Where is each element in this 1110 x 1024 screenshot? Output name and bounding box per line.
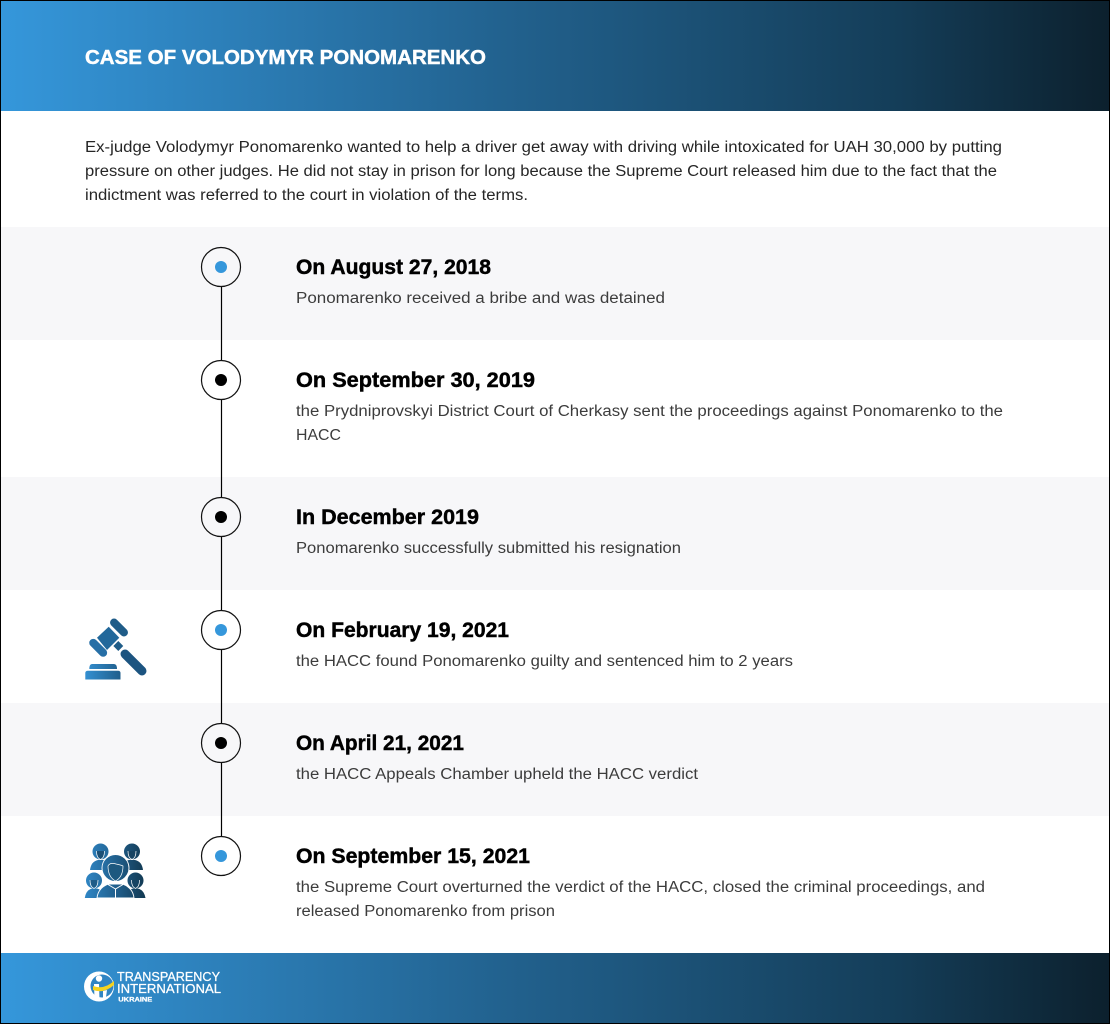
gavel base top: [89, 664, 117, 669]
back right judge: [120, 844, 143, 870]
event: September 30, 2019: HACC: [296, 427, 341, 444]
footer band: [0, 953, 1110, 1024]
event: August 27, 2018: On August 27, 2018: [296, 256, 491, 279]
timeline marker: December 2019: [202, 498, 240, 536]
logo wordmark: INTERNATIONAL: [117, 982, 221, 996]
logo: Transparency International Ukraine: [84, 970, 221, 1004]
timeline connector line: [220, 287, 222, 836]
logo globe: [84, 972, 114, 1002]
gavel head body: [97, 627, 119, 650]
intro text: pressure on other judges. He did not stay in prison for long because the Supreme Court released him due to the fact that the: [85, 163, 997, 180]
event: February 19, 2021: the HACC found Ponomarenko guilty and sentenced him to 2 years: [296, 653, 793, 670]
event: September 15, 2021: [296, 845, 985, 920]
event: April 21, 2021: [296, 732, 699, 783]
gavel head bottom cap: [88, 637, 109, 658]
intro text: [85, 139, 1002, 204]
icon: group of judges: [85, 844, 146, 898]
intro text: Ex-judge Volodymyr Ponomarenko wanted to help a driver get away with driving while intoxicated for UAH 30,000 by putting: [85, 139, 1002, 156]
front left judge: [85, 872, 107, 898]
event: August 27, 2018: Ponomarenko received a bribe and was detained: [296, 290, 665, 307]
event: December 2019: [296, 506, 681, 557]
centre judge: [97, 854, 134, 898]
event: September 30, 2019: On September 30, 2019: [296, 369, 535, 392]
event: April 21, 2021: On April 21, 2021: [296, 732, 464, 755]
timeline marker: September 15, 2021: [202, 836, 240, 876]
event: December 2019: Ponomarenko successfully submitted his resignation: [296, 540, 681, 557]
gavel base bottom: [85, 671, 120, 680]
gavel head top cap: [108, 617, 130, 638]
gavel handle: [119, 648, 148, 677]
event: September 30, 2019: [296, 369, 1003, 444]
gavel neck: [113, 641, 123, 651]
timeline marker: August 27, 2018: [202, 248, 240, 286]
event: December 2019: In December 2019: [296, 506, 479, 529]
icon: judge gavel: [85, 617, 148, 680]
event: August 27, 2018: [296, 256, 665, 307]
event: February 19, 2021: On February 19, 2021: [296, 619, 509, 642]
header band: [0, 0, 1110, 111]
logo wordmark: TRANSPARENCY: [117, 970, 221, 984]
event: April 21, 2021: the HACC Appeals Chamber upheld the HACC verdict: [296, 766, 699, 783]
intro text: indictment was referred to the court in violation of the terms.: [85, 187, 528, 204]
row backgrounds: [0, 227, 1110, 816]
event: September 15, 2021: released Ponomarenko from prison: [296, 903, 555, 920]
back left judge: [90, 844, 112, 870]
event: September 30, 2019: the Prydniprovskyi District Court of Cherkasy sent the proceedings against Ponomarenko to the: [296, 403, 1003, 420]
logo wordmark: UKRAINE: [118, 998, 152, 1004]
timeline marker: September 30, 2019: [202, 360, 240, 400]
event: September 15, 2021: On September 15, 2021: [296, 845, 530, 868]
event: September 15, 2021: the Supreme Court overturned the verdict of the HACC, closed the criminal proceedings, and: [296, 879, 985, 896]
timeline marker: February 19, 2021: [202, 610, 240, 650]
logo wordmark: [117, 970, 221, 1004]
event: February 19, 2021: [296, 619, 793, 670]
front right judge: [124, 872, 146, 898]
timeline marker: April 21, 2021: [202, 724, 240, 762]
title: CASE OF VOLODYMYR PONOMARENKO: [85, 46, 486, 69]
